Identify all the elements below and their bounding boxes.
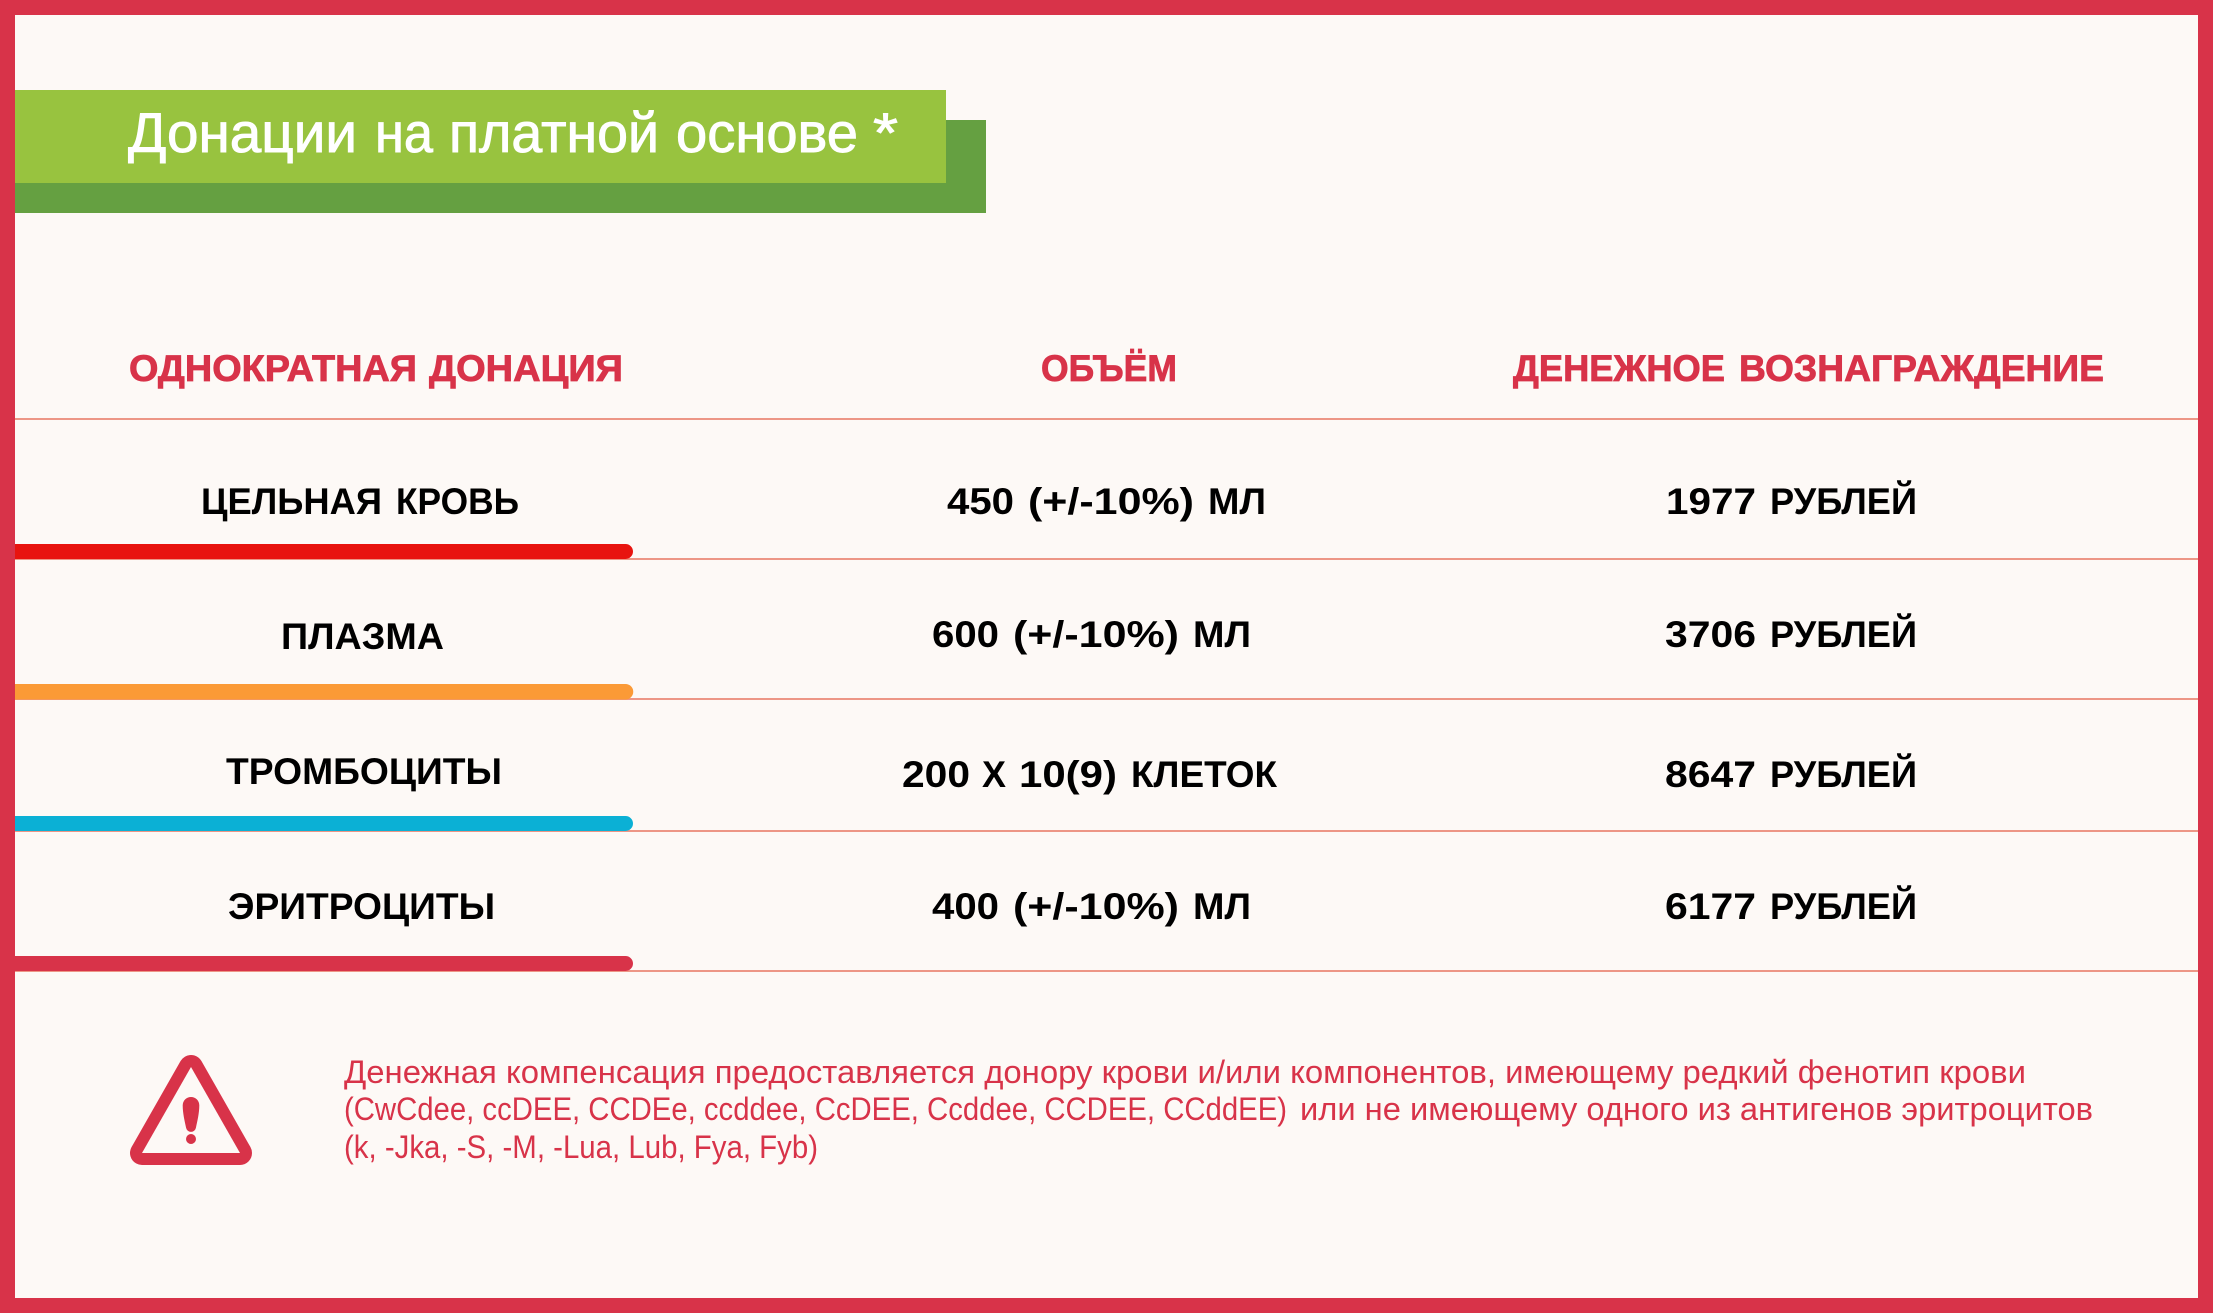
colour bar: crimson [15,956,633,971]
column heading: donation: ОДНОКРАТНАЯ [129,348,417,389]
volume: 10(9) [1019,754,1117,795]
label: ПЛАЗМА [281,616,444,657]
reward [1665,753,1917,795]
volume: 600 [932,614,999,655]
title: платной [449,101,659,164]
column heading: reward: ВОЗНАГРАЖДЕНИЕ [1739,348,2104,389]
volume [902,754,1277,795]
label: ТРОМБОЦИТЫ [226,751,502,792]
reward: РУБЛЕЙ [1770,613,1917,655]
volume: (+/-10%) [1013,886,1179,927]
label: КРОВЬ [396,481,519,522]
footnote text: или не имеющему одного из антигенов эритроцитов [1300,1091,2093,1127]
table header [129,348,2104,389]
column heading: volume: ОБЪЁМ [1041,348,1177,389]
label: ЦЕЛЬНАЯ [201,481,382,522]
colour bar: cyan [15,816,633,831]
reward: РУБЛЕЙ [1770,885,1917,927]
title: Донации [128,101,357,164]
volume: Х [982,754,1006,795]
row: red cells [15,885,1917,971]
footnote text: (CwCdee, ccDEE, CCDEe, ccddee, CcDEE, Ccddee, CCDEE, CCddEE) [344,1091,1287,1127]
footnote text: Денежная компенсация предоставляется донору крови и/или компонентов, имеющему редкий фенотип крови [344,1054,2026,1090]
title banner [15,90,986,213]
reward: 8647 [1665,754,1756,795]
footnote text [344,1054,2093,1165]
icon: warning triangle [142,1067,240,1153]
row: platelets [15,751,1917,831]
volume: 400 [932,886,999,927]
label: ЭРИТРОЦИТЫ [228,886,495,927]
reward: 1977 [1666,481,1756,522]
title: основе [676,101,858,164]
column heading: donation [129,348,623,389]
reward [1665,613,1917,655]
volume [932,614,1251,655]
title: * [873,101,898,164]
volume: 450 [947,481,1014,522]
column heading: donation: ДОНАЦИЯ [429,348,623,389]
title [128,101,898,164]
banner shadow [15,120,986,213]
volume: МЛ [1208,481,1266,522]
reward [1665,885,1917,927]
reward: РУБЛЕЙ [1770,480,1917,522]
volume [932,886,1251,927]
reward: 6177 [1665,886,1756,927]
reward [1666,480,1917,522]
volume: (+/-10%) [1013,614,1179,655]
volume: 200 [902,754,970,795]
reward: 3706 [1665,614,1756,655]
reward: РУБЛЕЙ [1770,753,1917,795]
volume: КЛЕТОК [1131,754,1277,795]
volume: (+/-10%) [1028,481,1194,522]
title: на [375,101,434,164]
column heading: reward: ДЕНЕЖНОЕ [1513,348,1725,389]
row: whole blood [15,480,1917,559]
volume: МЛ [1193,886,1251,927]
volume: МЛ [1193,614,1251,655]
row: plasma [15,613,1917,700]
footnote text: (k, -Jka, -S, -M, -Lua, Lub, Fya, Fyb) [344,1129,818,1165]
banner face [15,90,946,183]
colour bar: red [15,544,633,559]
volume [947,481,1266,522]
colour bar: orange [15,684,633,700]
label [201,481,519,522]
column heading: reward [1513,348,2104,389]
